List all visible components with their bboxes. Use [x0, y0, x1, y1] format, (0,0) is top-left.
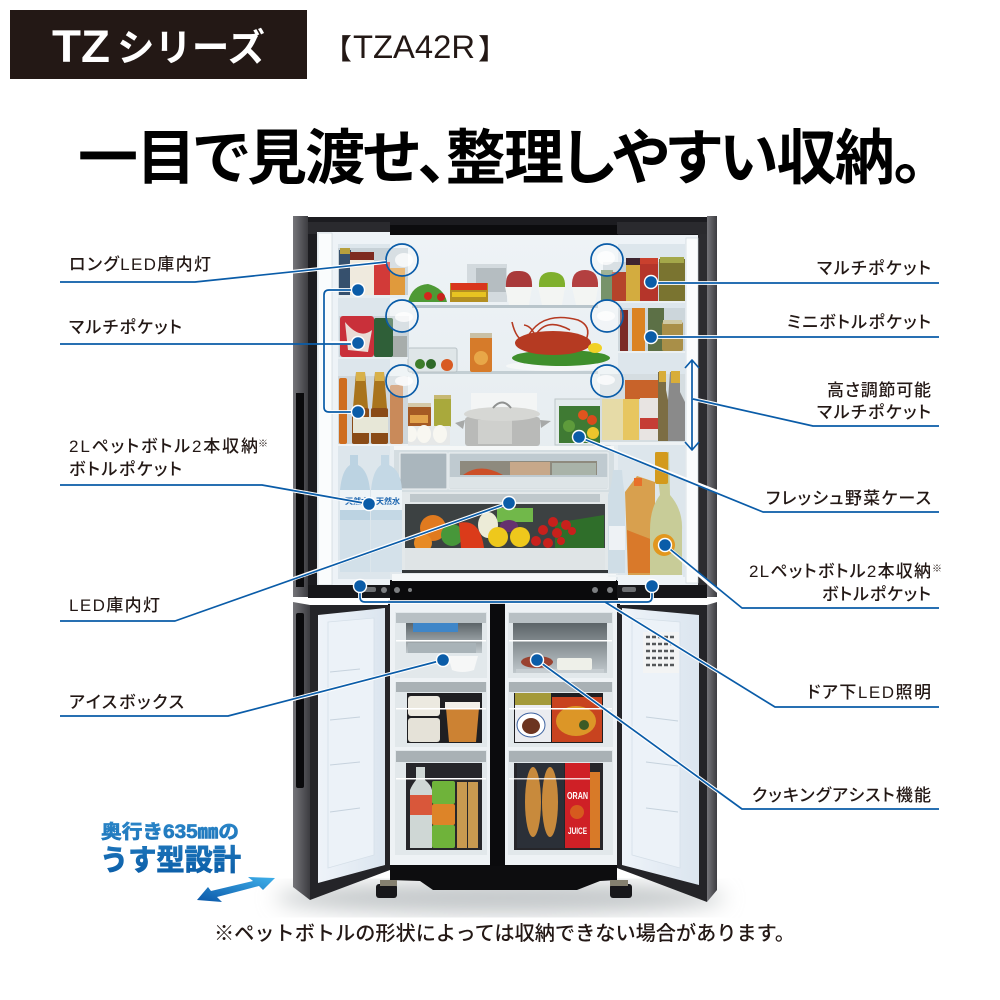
lower left door	[293, 602, 390, 900]
callout: door bottom LED: ドア下LED照明	[807, 683, 931, 702]
series title badge: シリーズ	[117, 27, 265, 70]
top shelf items	[408, 264, 598, 305]
model name: TZA42R	[353, 29, 475, 65]
LED highlight circles	[386, 244, 623, 397]
callout: height adjustable multi pocket with arrow	[685, 360, 939, 450]
callout: fresh vegetable case	[572, 430, 939, 512]
refrigerator back wall	[390, 235, 618, 580]
right door pockets	[600, 257, 685, 445]
callout: right multi pocket: マルチポケット	[817, 259, 931, 278]
callout: LED light: LED庫内灯	[69, 596, 160, 615]
series title badge: TZ	[52, 21, 110, 72]
model name: 】	[478, 34, 493, 65]
freezer right bottom drawer: ORAN	[567, 791, 588, 802]
vegetable drawer	[392, 492, 616, 581]
callout: left 2L bottle pocket: ボトルポケット	[69, 460, 182, 479]
right door bottom pocket with bottles	[608, 452, 683, 577]
floor shadow	[275, 882, 725, 914]
left door pockets	[338, 248, 409, 446]
series title badge	[10, 10, 307, 79]
callout: mini bottle pocket	[644, 313, 939, 344]
freezer left top drawer: ice box	[395, 612, 487, 678]
freezer right bottom drawer: JUICE	[568, 826, 587, 836]
footnote: ※ペットボトルの形状によっては収納できない場合があります。	[214, 922, 795, 945]
callout: height adjustable multi pocket with arrow: マルチポケット	[817, 403, 931, 422]
slim depth badge	[100, 821, 275, 902]
left door water bottles: 天然水	[345, 496, 369, 506]
callout: long LED light	[60, 255, 386, 282]
callout: left multi pocket	[60, 284, 364, 418]
callout: right 2L bottle pocket: ※	[932, 564, 942, 575]
lobster platter	[506, 318, 610, 371]
left door water bottles: 天然水	[376, 496, 400, 506]
freezer right middle drawer	[508, 682, 613, 747]
bottom shelf items and pot	[403, 393, 551, 446]
fresh vegetable case	[555, 399, 610, 445]
callout: cooking assist	[530, 654, 939, 809]
bottom hinges upper section	[308, 581, 707, 600]
icon: depth double arrow	[197, 877, 275, 902]
freezer left middle drawer	[395, 682, 487, 747]
callout: left 2L bottle pocket: 2Lペットボトル2本収納	[69, 437, 258, 456]
slim depth badge: うす型設計	[100, 844, 241, 877]
freezer base and feet	[376, 866, 632, 898]
callout: right multi pocket	[644, 259, 939, 288]
callout: mini bottle pocket: ミニボトルポケット	[787, 313, 931, 332]
freezer cabinet	[388, 600, 620, 868]
refrigerator	[293, 216, 717, 902]
left door water bottles	[340, 455, 402, 572]
freezer right top drawer: cooking assist	[508, 612, 613, 678]
lower right door	[617, 602, 717, 902]
callout: right 2L bottle pocket	[658, 538, 942, 608]
model name: 【	[337, 34, 352, 65]
callout: LED light	[60, 496, 516, 621]
callout: left multi pocket: マルチポケット	[69, 318, 182, 337]
slim depth badge: 奥行き635㎜の	[101, 821, 239, 843]
upper right door liner	[617, 235, 698, 587]
callout: door bottom LED	[354, 580, 939, 707]
upper left door liner	[317, 232, 390, 587]
freezer left bottom drawer	[395, 750, 487, 855]
freezer right bottom drawer	[508, 750, 613, 855]
callout: cooking assist: クッキングアシスト機能	[752, 786, 931, 805]
callout: ice box	[60, 654, 450, 716]
callout: right 2L bottle pocket: ボトルポケット	[822, 585, 931, 604]
middle shelf items	[408, 333, 492, 372]
main headline: 一目で見渡せ、整理しやすい収納。	[78, 125, 923, 192]
callout: ice box: アイスボックス	[69, 693, 184, 712]
callout: long LED light: ロングLED庫内灯	[69, 255, 211, 274]
callout: left 2L bottle pocket: ※	[258, 439, 268, 450]
callout: fresh vegetable case: フレッシュ野菜ケース	[766, 489, 931, 508]
chilled compartment	[394, 450, 614, 492]
upper compartment cabinet	[293, 216, 717, 597]
glass shelves	[394, 305, 614, 452]
callout: right 2L bottle pocket: 2Lペットボトル2本収納	[749, 562, 931, 581]
callout: left 2L bottle pocket	[60, 437, 376, 510]
callout: height adjustable multi pocket with arrow: 高さ調節可能	[827, 381, 931, 400]
